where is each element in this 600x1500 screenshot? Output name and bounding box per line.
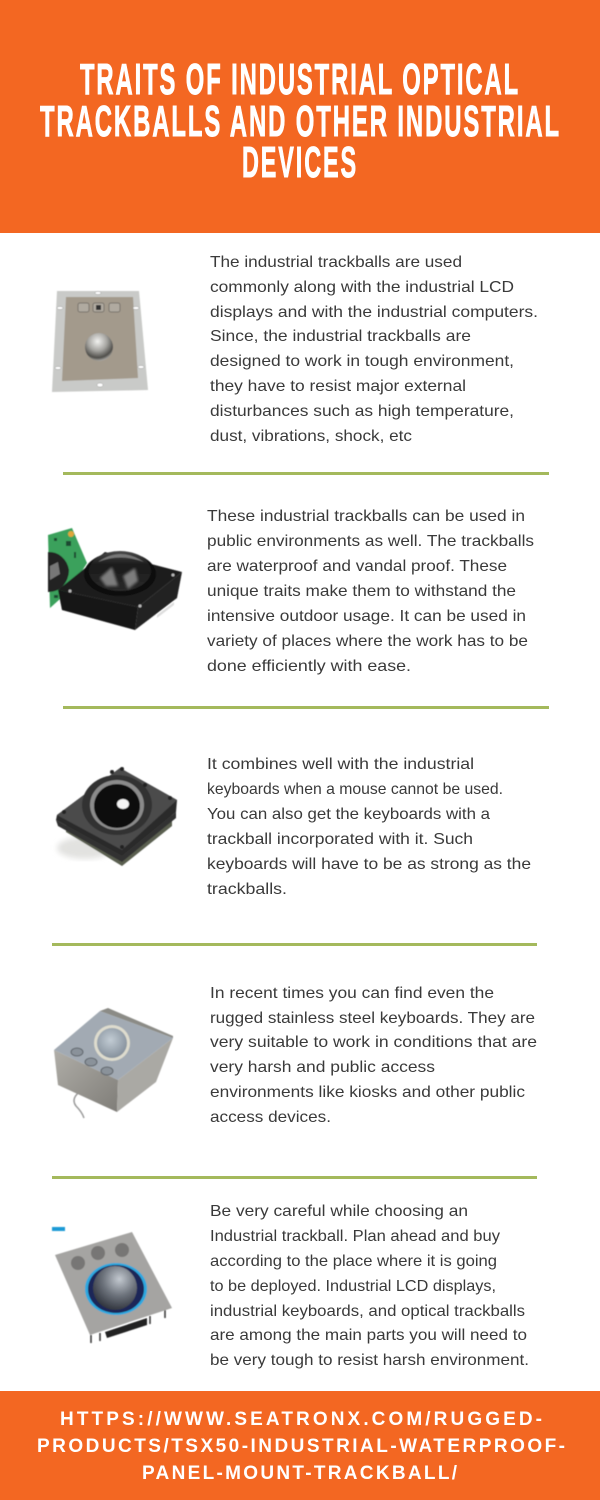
text block 3: keyboards when a mouse cannot be used.: [207, 781, 503, 798]
text block 5: to be deployed. Industrial LCD displays,: [210, 1278, 496, 1295]
text block 2: are waterproof and vandal proof. These: [207, 558, 507, 575]
header banner: [0, 0, 600, 233]
text block 5: [210, 1203, 529, 1369]
text block 2: public environments as well. The trackballs: [207, 533, 534, 550]
text block 5: Be very careful while choosing an: [210, 1203, 468, 1220]
text block 3: keyboards will have to be as strong as the: [207, 856, 531, 873]
text block 3: [207, 756, 531, 898]
text block 5: be very tough to resist harsh environment.: [210, 1352, 529, 1369]
image: stainless panel trackball: [52, 291, 148, 392]
text block 4: very harsh and public access: [210, 1059, 435, 1076]
text block 4: In recent times you can find even the: [210, 985, 494, 1002]
footer URL: PANEL-MOUNT-TRACKBALL/: [142, 1463, 458, 1484]
text block 2: variety of places where the work has to be: [207, 633, 528, 650]
text block 4: rugged stainless steel keyboards. They are: [210, 1010, 535, 1027]
text block 4: access devices.: [210, 1109, 331, 1126]
text block 3: trackballs.: [207, 881, 287, 898]
text block 5: industrial keyboards, and optical trackballs: [210, 1303, 525, 1320]
image: black trackball module with circuit board: [48, 528, 182, 630]
text block 1: Since, the industrial trackballs are: [210, 328, 471, 345]
footer URL: PRODUCTS/TSX50-INDUSTRIAL-WATERPROOF-: [37, 1436, 565, 1457]
image: backlit trackball panel: [52, 1227, 172, 1343]
title: [40, 55, 561, 187]
text block 3: You can also get the keyboards with a: [207, 806, 490, 823]
text block 4: environments like kiosks and other public: [210, 1084, 525, 1101]
image: embedded trackball module: [56, 767, 177, 866]
text block 5: Industrial trackball. Plan ahead and buy: [210, 1228, 500, 1245]
footer URL: HTTPS://WWW.SEATRONX.COM/RUGGED-: [60, 1409, 542, 1430]
text block 1: [210, 254, 538, 445]
text block 1: they have to resist major external: [210, 378, 466, 395]
text block 2: These industrial trackballs can be used in: [207, 508, 525, 525]
text block 5: according to the place where it is going: [210, 1253, 497, 1270]
text block 1: disturbances such as high temperature,: [210, 403, 514, 420]
title: DEVICES: [242, 138, 358, 187]
text block 1: designed to work in tough environment,: [210, 353, 514, 370]
text block 2: done efficiently with ease.: [207, 658, 411, 675]
text block 5: are among the main parts you will need to: [210, 1327, 527, 1344]
text block 1: The industrial trackballs are used: [210, 254, 462, 271]
image: stainless desktop trackball: [54, 1008, 173, 1118]
text block 2: unique traits make them to withstand the: [207, 583, 516, 600]
footer banner: [0, 1391, 600, 1500]
text block 3: It combines well with the industrial: [207, 756, 474, 773]
text block 1: displays and with the industrial computers.: [210, 304, 538, 321]
text block 4: [210, 985, 537, 1126]
text block 2: [207, 508, 534, 675]
text block 3: trackball incorporated with it. Such: [207, 831, 473, 848]
text block 2: intensive outdoor usage. It can be used in: [207, 608, 526, 625]
text block 1: dust, vibrations, shock, etc: [210, 428, 412, 445]
text block 4: very suitable to work in conditions that are: [210, 1034, 537, 1051]
footer URL: [37, 1409, 565, 1484]
text block 1: commonly along with the industrial LCD: [210, 279, 514, 296]
